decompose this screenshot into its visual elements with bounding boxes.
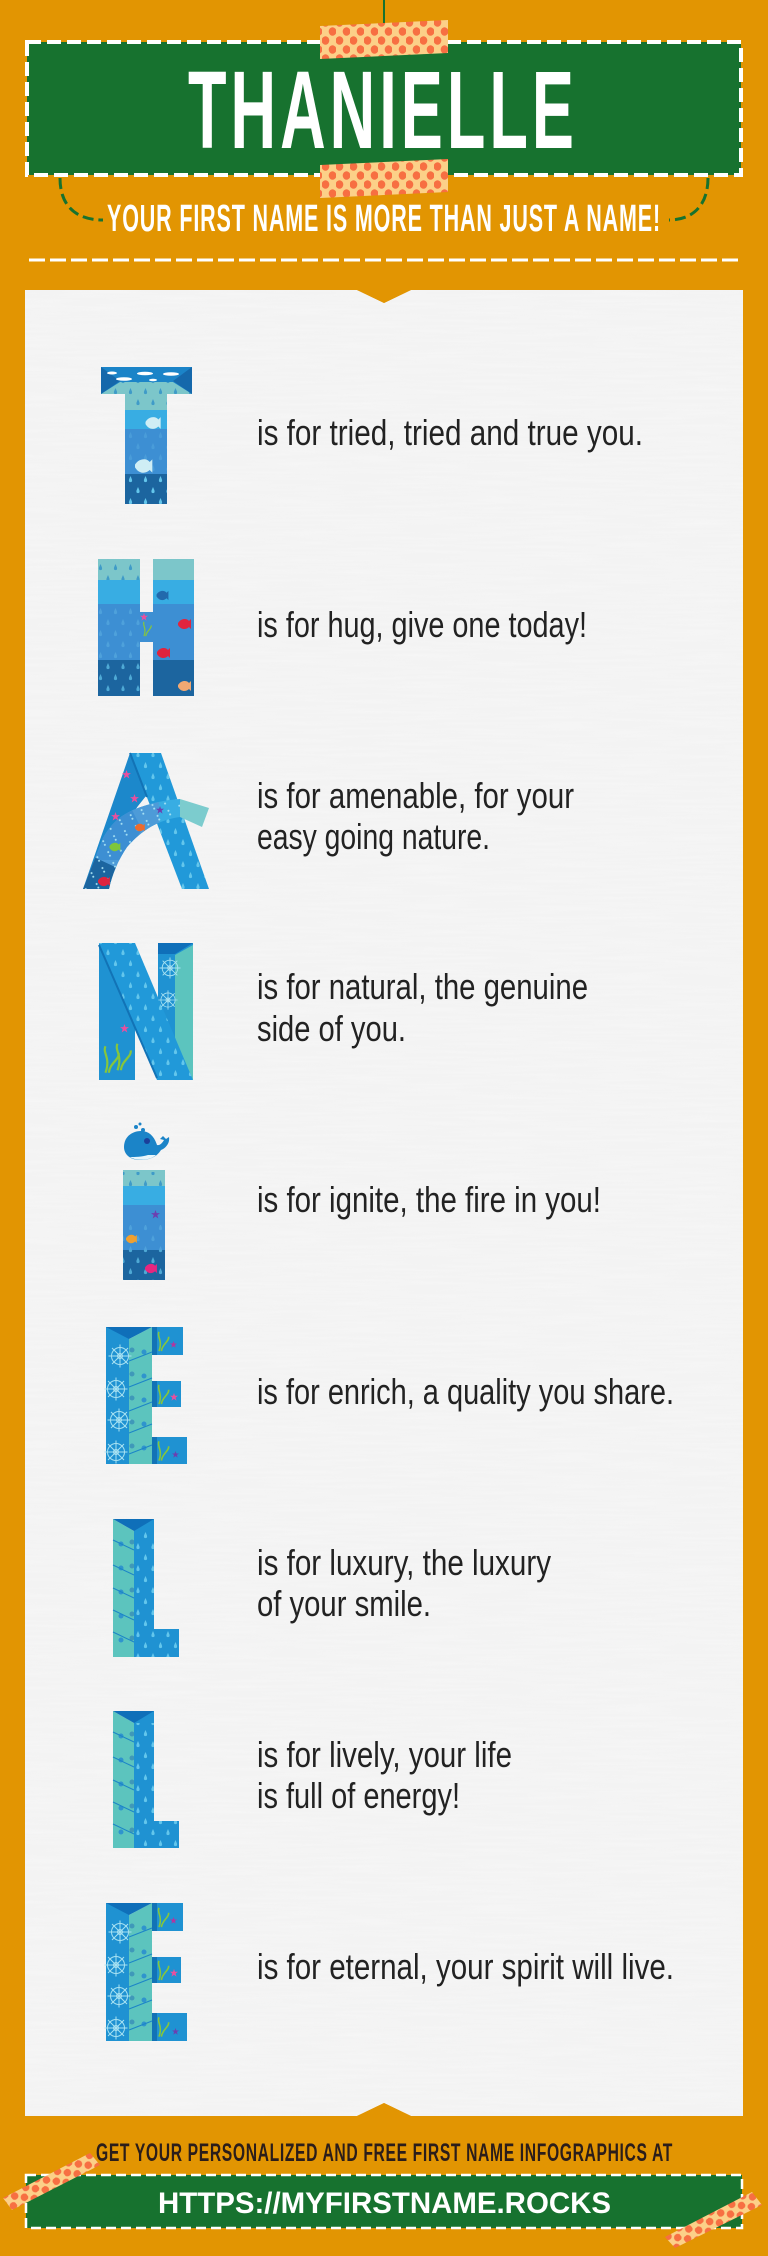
text: T: is for tried, tried and true you. bbox=[257, 412, 643, 453]
panel: letters bbox=[25, 290, 743, 2116]
text: L: is for lively, your life bbox=[257, 1734, 512, 1775]
text: A bbox=[257, 775, 574, 857]
tape: bottom bbox=[320, 159, 448, 198]
text: L bbox=[257, 1542, 551, 1624]
letter I bbox=[123, 1170, 165, 1280]
dashed connectors bbox=[60, 178, 708, 220]
text: N: is for natural, the genuine bbox=[257, 966, 588, 1007]
letter descriptions bbox=[257, 412, 674, 1987]
header banner bbox=[27, 42, 741, 175]
letter T bbox=[101, 367, 192, 504]
text: L: is full of energy! bbox=[257, 1775, 460, 1816]
whale bbox=[124, 1122, 169, 1160]
tape: footer left bbox=[3, 2153, 100, 2210]
letter L bbox=[113, 1519, 179, 1657]
hanging string bbox=[383, 0, 385, 25]
footer url: HTTPS://MYFIRSTNAME.ROCKS bbox=[158, 2187, 611, 2220]
text: L: of your smile. bbox=[257, 1583, 431, 1624]
letter H bbox=[98, 559, 194, 696]
text: E: is for eternal, your spirit will live. bbox=[257, 1946, 674, 1987]
footer banner bbox=[26, 2175, 742, 2228]
tape: top bbox=[320, 20, 448, 59]
letter E bbox=[104, 1903, 187, 2041]
text: L bbox=[257, 1734, 512, 1816]
text: L: is for luxury, the luxury bbox=[257, 1542, 551, 1583]
text: I: is for ignite, the fire in you! bbox=[257, 1179, 601, 1220]
letter L bbox=[113, 1711, 179, 1848]
letter N bbox=[99, 943, 193, 1080]
text: H: is for hug, give one today! bbox=[257, 604, 587, 645]
letter E bbox=[104, 1327, 187, 1464]
dashed divider bbox=[29, 258, 739, 262]
tape: footer right bbox=[665, 2192, 762, 2248]
text: A: easy going nature. bbox=[257, 816, 490, 857]
text: N bbox=[257, 966, 588, 1049]
text: E: is for enrich, a quality you share. bbox=[257, 1371, 674, 1412]
text: N: side of you. bbox=[257, 1008, 406, 1049]
text: A: is for amenable, for your bbox=[257, 775, 574, 816]
letter A bbox=[83, 752, 209, 889]
